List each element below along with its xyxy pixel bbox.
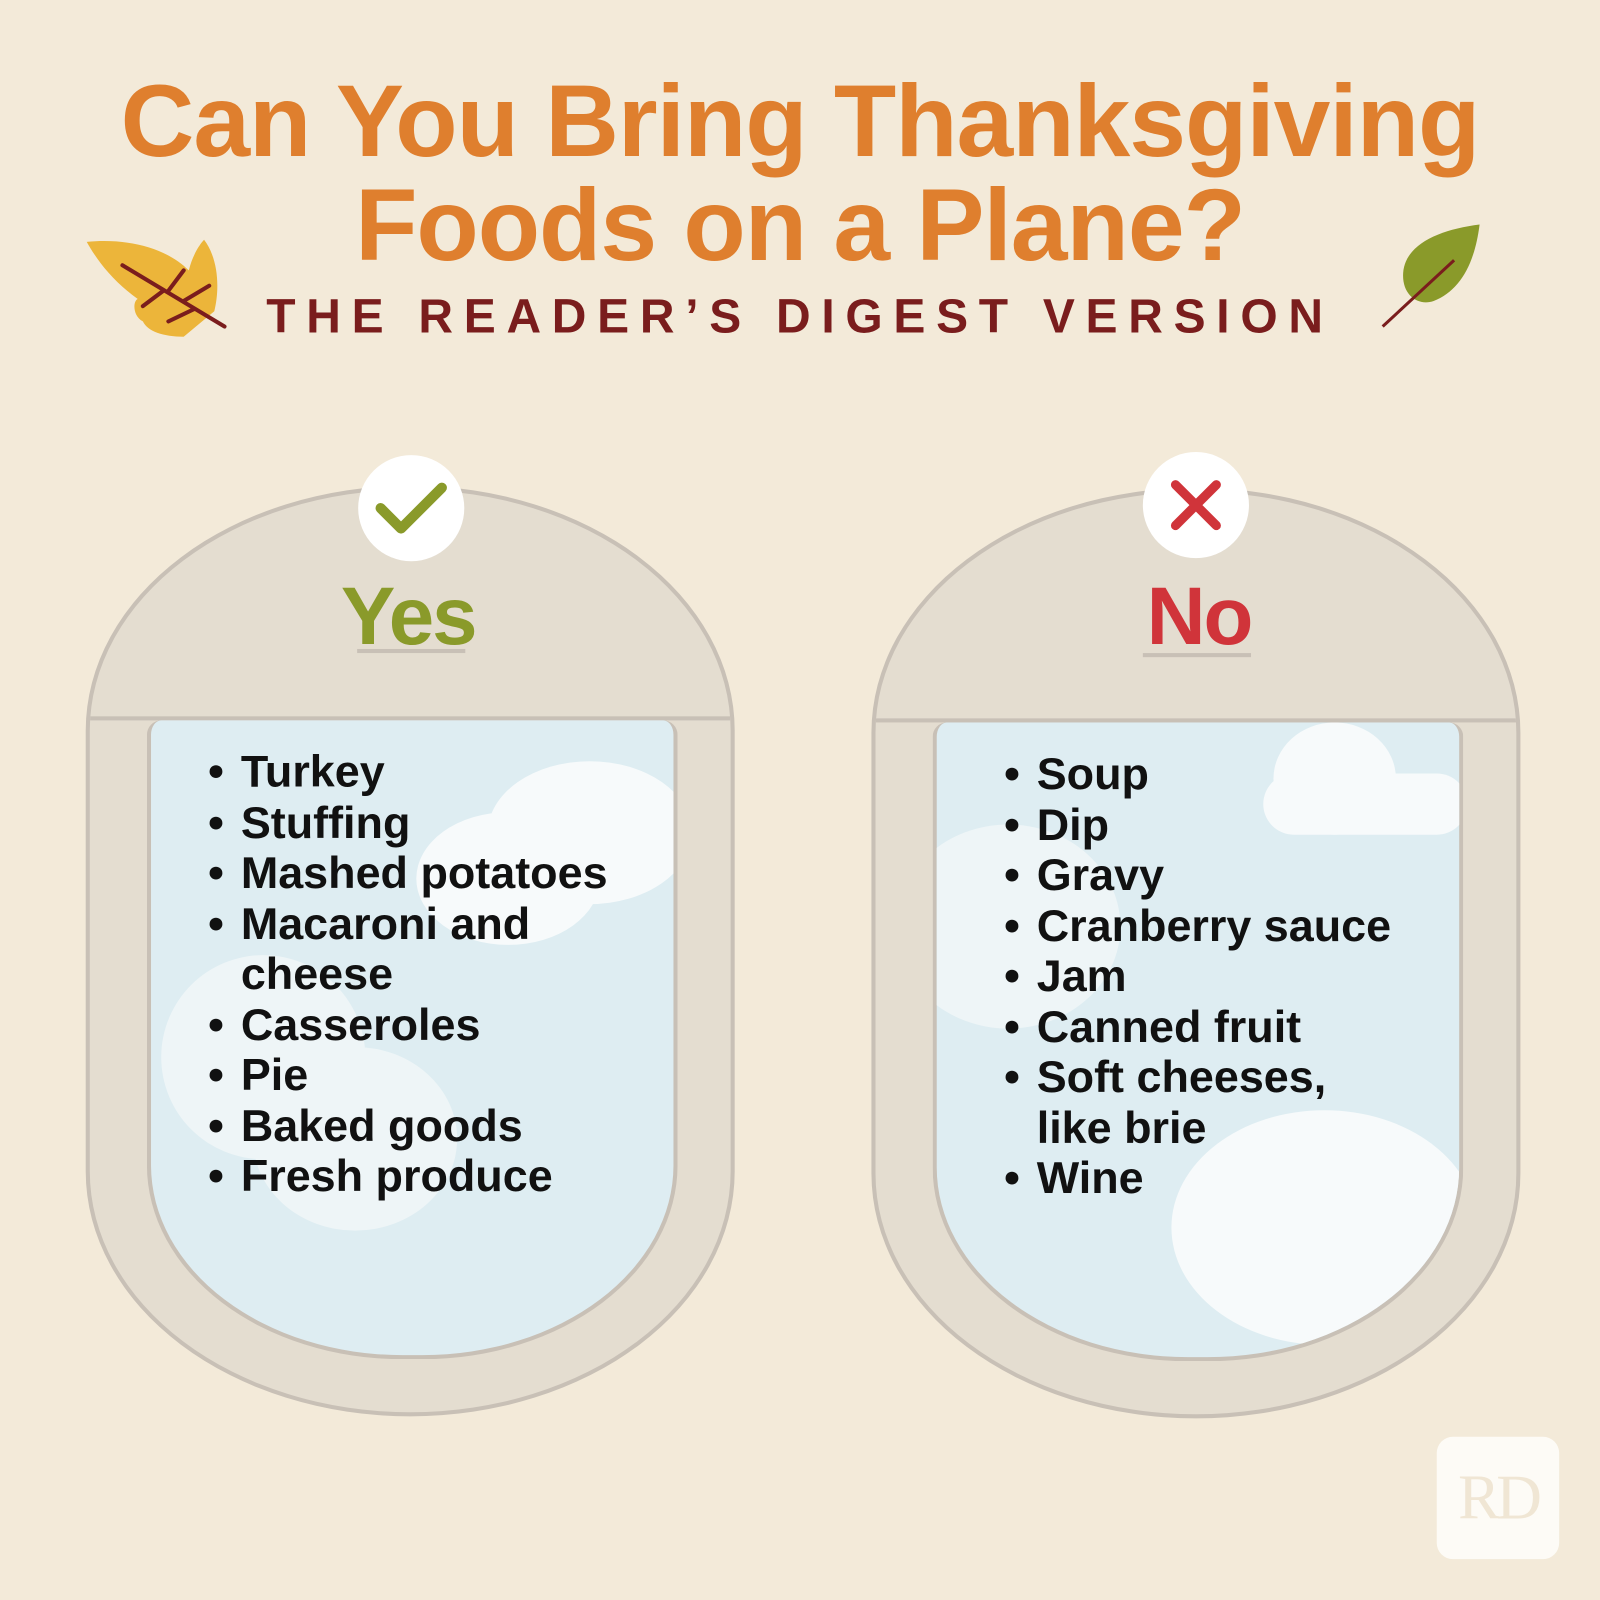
icon: green leaf <box>1382 224 1480 328</box>
icon: x circle <box>1143 452 1249 558</box>
no glass with list: like brie <box>1037 1103 1206 1153</box>
logo: RD: RD <box>1458 1463 1538 1533</box>
title: Can You Bring Thanksgiving <box>121 64 1479 179</box>
no glass with list: Soft cheeses, <box>1037 1052 1326 1102</box>
yes glass with list: Fresh produce <box>241 1151 553 1201</box>
heading: no: No <box>1147 570 1251 661</box>
icon: check circle <box>358 455 464 561</box>
yes glass with list <box>147 720 678 1359</box>
yes glass with list: Baked goods <box>241 1101 523 1151</box>
icon: yellow leaf <box>86 240 227 337</box>
panel: no window <box>871 488 1520 1418</box>
logo: RD <box>1437 1437 1559 1559</box>
yes glass with list: Macaroni and <box>241 898 530 948</box>
yes glass with list: Casseroles <box>241 999 480 1049</box>
heading: yes: Yes <box>341 570 475 661</box>
yes glass with list: cheese <box>241 949 393 999</box>
no glass with list: Soup <box>1037 749 1149 799</box>
yes glass with list: Mashed potatoes <box>241 848 608 898</box>
no glass with list: Cranberry sauce <box>1037 901 1391 951</box>
subtitle: THE READER’S DIGEST VERSION <box>266 289 1334 343</box>
no glass with list: Dip <box>1037 799 1109 849</box>
no glass with list <box>933 722 1463 1361</box>
panel: yes window <box>86 486 735 1416</box>
yes glass with list: Turkey <box>241 747 385 797</box>
yes glass with list: Stuffing <box>241 797 410 847</box>
no glass with list: Canned fruit <box>1037 1002 1301 1052</box>
yes glass with list: Pie <box>241 1050 308 1100</box>
no glass with list: Gravy <box>1037 850 1164 900</box>
no glass with list: Jam <box>1037 951 1127 1001</box>
title <box>121 64 1479 283</box>
no glass with list: Wine <box>1037 1153 1144 1203</box>
title: Foods on a Plane? <box>355 168 1245 283</box>
